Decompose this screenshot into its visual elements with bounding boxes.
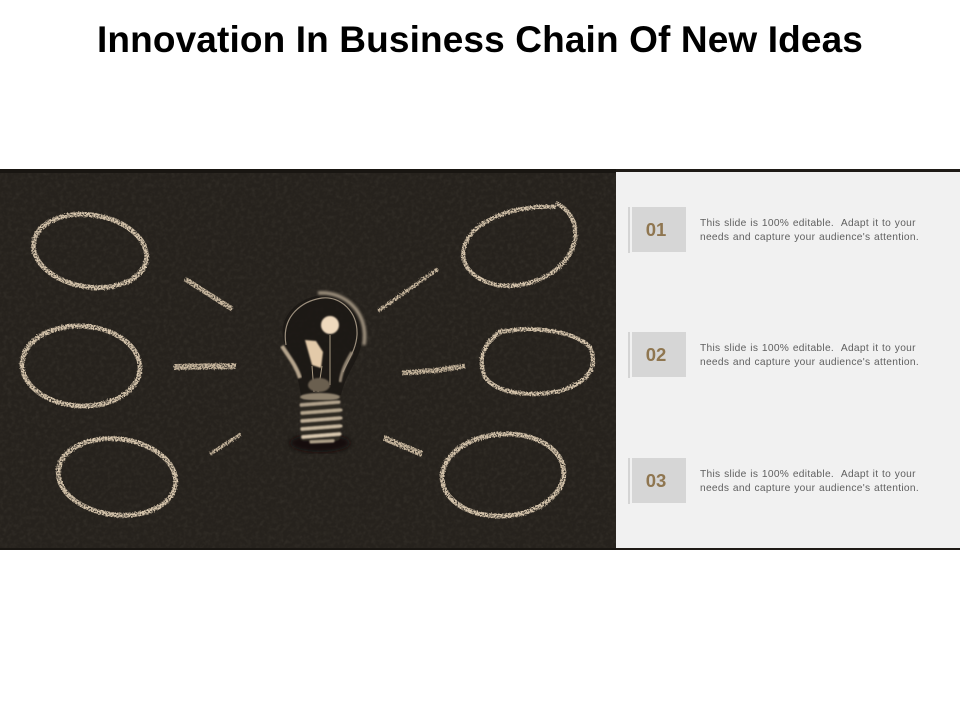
list item 03 [628, 458, 919, 504]
chalk rays [174, 269, 465, 454]
list item 01 [628, 207, 919, 253]
chalkboard background [0, 169, 616, 550]
list item 03: 03 [646, 470, 666, 491]
list item 01: 01 [646, 219, 666, 240]
bulb screw base [300, 400, 341, 442]
title: Innovation In Business Chain Of New Ideas [97, 19, 863, 60]
chalk circles [20, 203, 593, 522]
list item 02: 02 [646, 344, 666, 365]
list item 03: This slide is 100% editable. Adapt it to your [700, 469, 916, 480]
list item 02: This slide is 100% editable. Adapt it to your [700, 343, 916, 354]
list item 01: needs and capture your audience's attention. [700, 232, 919, 242]
panel: numbered list [616, 169, 960, 550]
list item 02 [628, 332, 919, 378]
list item 03: needs and capture your audience's attention. [700, 482, 919, 494]
list item 01: This slide is 100% editable. Adapt it to your [700, 218, 916, 229]
icon: light bulb [282, 293, 365, 452]
photo: chalkboard with light bulb [0, 169, 616, 550]
list item 02: needs and capture your audience's attention. [700, 356, 919, 368]
